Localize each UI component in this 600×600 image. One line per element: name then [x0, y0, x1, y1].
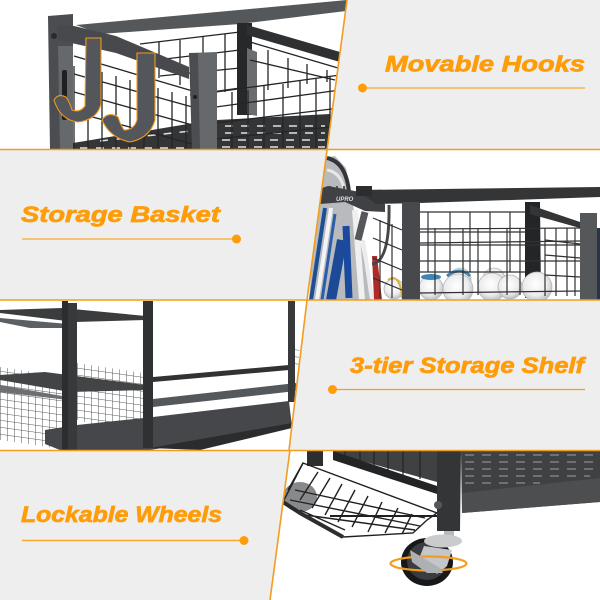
- panel: storage basket photo: [309, 156, 600, 304]
- bottom shelf: [45, 401, 292, 450]
- top rail: [76, 0, 347, 34]
- wire grid: [373, 212, 580, 298]
- panel: 3-tier shelf label: [289, 300, 600, 450]
- top rail: [356, 187, 600, 204]
- heading: 3-tier Storage Shelf: [350, 353, 587, 378]
- panel: lockable wheels photo: [283, 450, 600, 586]
- wire panels: [0, 367, 62, 448]
- leader line: [22, 234, 241, 244]
- front right post: [189, 52, 217, 150]
- pull-out wire basket: [283, 463, 437, 537]
- front post: [437, 450, 461, 531]
- leader line: [22, 536, 248, 545]
- leader line: [358, 84, 585, 92]
- icon: caster wheel with ring: [390, 531, 466, 586]
- icon: right hook with highlight: [102, 53, 155, 142]
- wire grid: [74, 32, 340, 150]
- upper shelves: [0, 308, 146, 322]
- posts: [62, 301, 68, 451]
- basket floor: [73, 114, 330, 150]
- heading: Movable Hooks: [385, 52, 585, 76]
- panel: storage basket label: [0, 150, 327, 300]
- heading: Lockable Wheels: [21, 502, 222, 527]
- far post: [525, 202, 541, 298]
- back rails: [153, 365, 289, 382]
- bottom shelf: [461, 450, 600, 513]
- panel: movable hooks photo: [48, 0, 347, 150]
- front crossbar: [73, 26, 189, 79]
- front left post: [48, 14, 73, 150]
- balls: [384, 268, 552, 300]
- club holder arm: [320, 186, 385, 212]
- panel: 3-tier shelf photo: [0, 301, 300, 451]
- frame post stub: [307, 451, 323, 466]
- heading: Storage Basket: [21, 202, 222, 227]
- golf clubs: [309, 156, 372, 300]
- leader line: [328, 385, 585, 394]
- panel: storage basket photo: UPRO: [336, 197, 354, 203]
- panel: movable hooks label: [327, 0, 600, 150]
- far post and rail: [237, 23, 252, 115]
- wire panel: [333, 450, 437, 482]
- front posts: [402, 202, 420, 300]
- panel: lockable wheels label: [0, 450, 290, 600]
- icon: left hook with highlight: [54, 38, 101, 122]
